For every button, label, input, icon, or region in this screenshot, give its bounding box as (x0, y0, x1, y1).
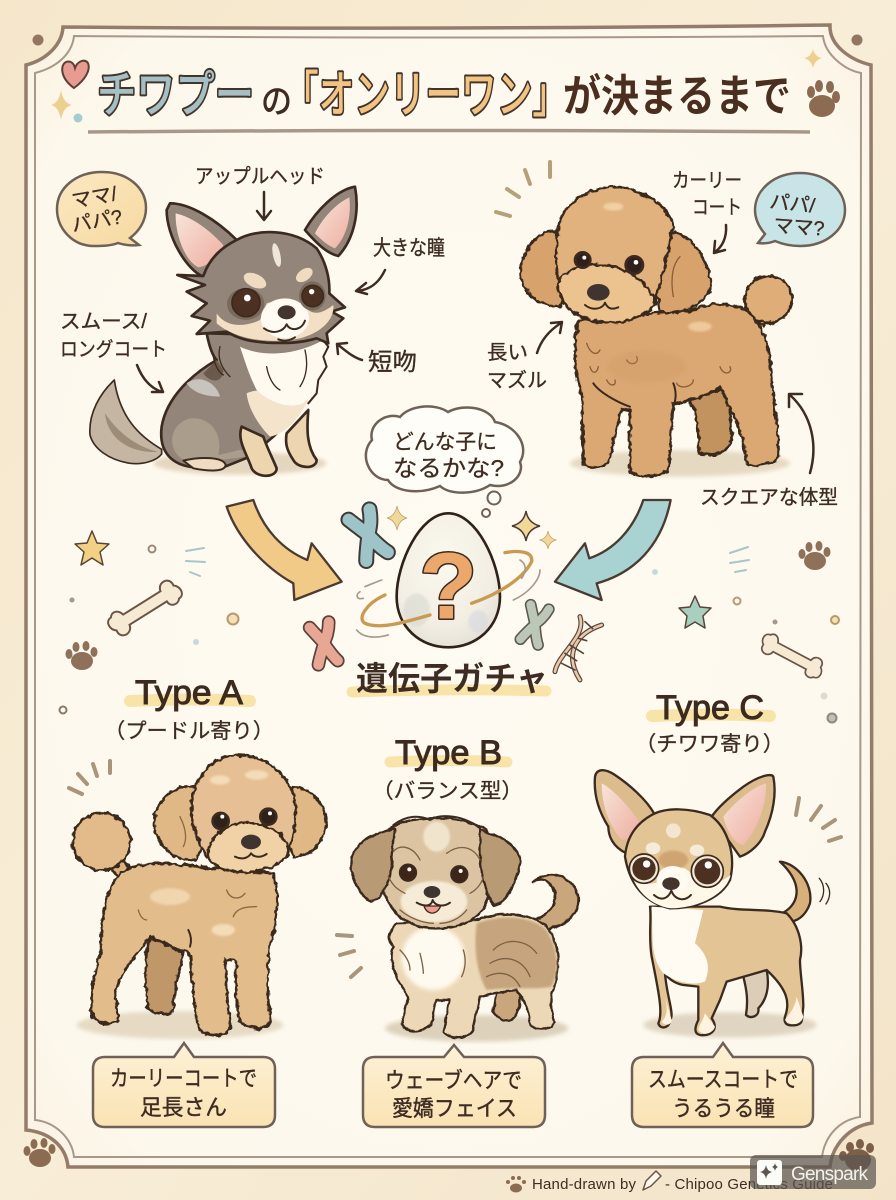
label: long muzzle: マズル (487, 369, 547, 392)
callout B: 愛嬌フェイス (392, 1096, 517, 1121)
label: curly coat (672, 170, 742, 253)
title (88, 67, 810, 132)
callout A (93, 1043, 275, 1127)
bone left (104, 576, 186, 640)
label: smooth long coat: スムース/ (60, 311, 147, 333)
burst marks type A (69, 761, 110, 794)
paw right middle (798, 541, 830, 570)
callout C: スムースコートで (648, 1067, 798, 1092)
label: short muzzle: 短吻 (368, 349, 417, 376)
genspark badge (750, 1155, 876, 1189)
callout C: うるうる瞳 (672, 1096, 775, 1121)
genspark badge: Genspark (791, 1164, 868, 1185)
label: long muzzle (487, 322, 562, 392)
burst marks type B (337, 935, 361, 977)
type B dog (351, 816, 578, 1042)
arrow: blue (555, 500, 671, 600)
footer credit (506, 1171, 833, 1193)
type C heading: Type C (656, 689, 764, 727)
label: curly coat: カーリー (672, 170, 742, 192)
sparkles near egg (387, 506, 556, 549)
type A heading: （プードル寄り） (104, 720, 274, 743)
thought bubble (366, 406, 523, 517)
label: curly coat: コート (692, 197, 742, 219)
icon: paw title (807, 80, 840, 117)
speech bubble: papa mama: パパ/ (768, 191, 817, 218)
title: 「オンリーワン」 (283, 67, 568, 123)
speech bubble: mama papa: パパ? (70, 206, 124, 237)
type B heading: Type B (395, 734, 502, 772)
confetti dots and dashes (60, 546, 839, 722)
label: smooth long coat (60, 311, 167, 392)
paw left middle (66, 641, 98, 670)
callout A: 足長さん (140, 1095, 227, 1120)
label: big eyes: 大きな瞳 (373, 237, 445, 260)
label: short muzzle (337, 343, 417, 376)
type C dog (595, 770, 830, 1038)
arrow: yellow (227, 500, 342, 600)
thought bubble: どんな子に (393, 431, 497, 454)
chromosome: pink (309, 622, 338, 665)
footer credit: - Chipoo Genetics Guide (665, 1176, 833, 1193)
icon: heart (62, 61, 89, 88)
speech bubble: mama papa: ママ/ (70, 183, 119, 213)
type C heading (635, 689, 784, 756)
speech bubble: papa mama (755, 173, 845, 246)
callout A: カーリーコートで (110, 1066, 257, 1091)
callout B (363, 1045, 545, 1127)
label: square body: スクエアな体型 (700, 486, 838, 509)
callout C (632, 1043, 813, 1127)
type B heading (372, 734, 523, 803)
type A dog (73, 755, 326, 1039)
gacha heading: 遺伝子ガチャ (356, 660, 548, 697)
thought bubble: なるかな? (393, 455, 504, 481)
icon: sparkle right (804, 49, 822, 68)
star yellow (75, 531, 109, 565)
footer credit: Hand-drawn by (532, 1176, 636, 1193)
burst marks type C (796, 798, 841, 841)
type A heading: Type A (135, 674, 243, 712)
gacha egg: ? (419, 533, 477, 639)
chihuahua parent (90, 187, 357, 476)
gacha egg (357, 513, 540, 647)
poodle parent (520, 187, 792, 477)
star green (679, 596, 711, 628)
icon: dna (555, 617, 602, 680)
label: apple head (195, 166, 325, 220)
title: が決まるまで (563, 72, 791, 121)
callout B: ウェーブヘアで (385, 1068, 522, 1093)
chromosome: sage (520, 603, 550, 645)
burst marks poodle (496, 162, 550, 216)
label: long muzzle: 長い (487, 342, 528, 364)
type C heading: （チワワ寄り） (635, 733, 784, 756)
paw bottom right (839, 1139, 874, 1171)
bone right (757, 630, 827, 682)
paw bottom left (24, 1138, 56, 1167)
label: smooth long coat: ロングコート (60, 338, 167, 361)
speech bubble: papa mama: ママ? (773, 215, 825, 241)
type B heading: （バランス型） (372, 780, 523, 803)
type A heading (104, 674, 274, 743)
title: チワプー (97, 67, 254, 123)
icon: teal dot (74, 114, 82, 122)
icon: sparkle left (51, 90, 72, 120)
label: square body (700, 394, 838, 509)
label: big eyes (356, 237, 445, 294)
chromosome: blue (348, 509, 388, 561)
speech bubble: mama papa (57, 172, 146, 246)
label: apple head: アップルヘッド (195, 166, 325, 188)
title: の (261, 83, 292, 121)
